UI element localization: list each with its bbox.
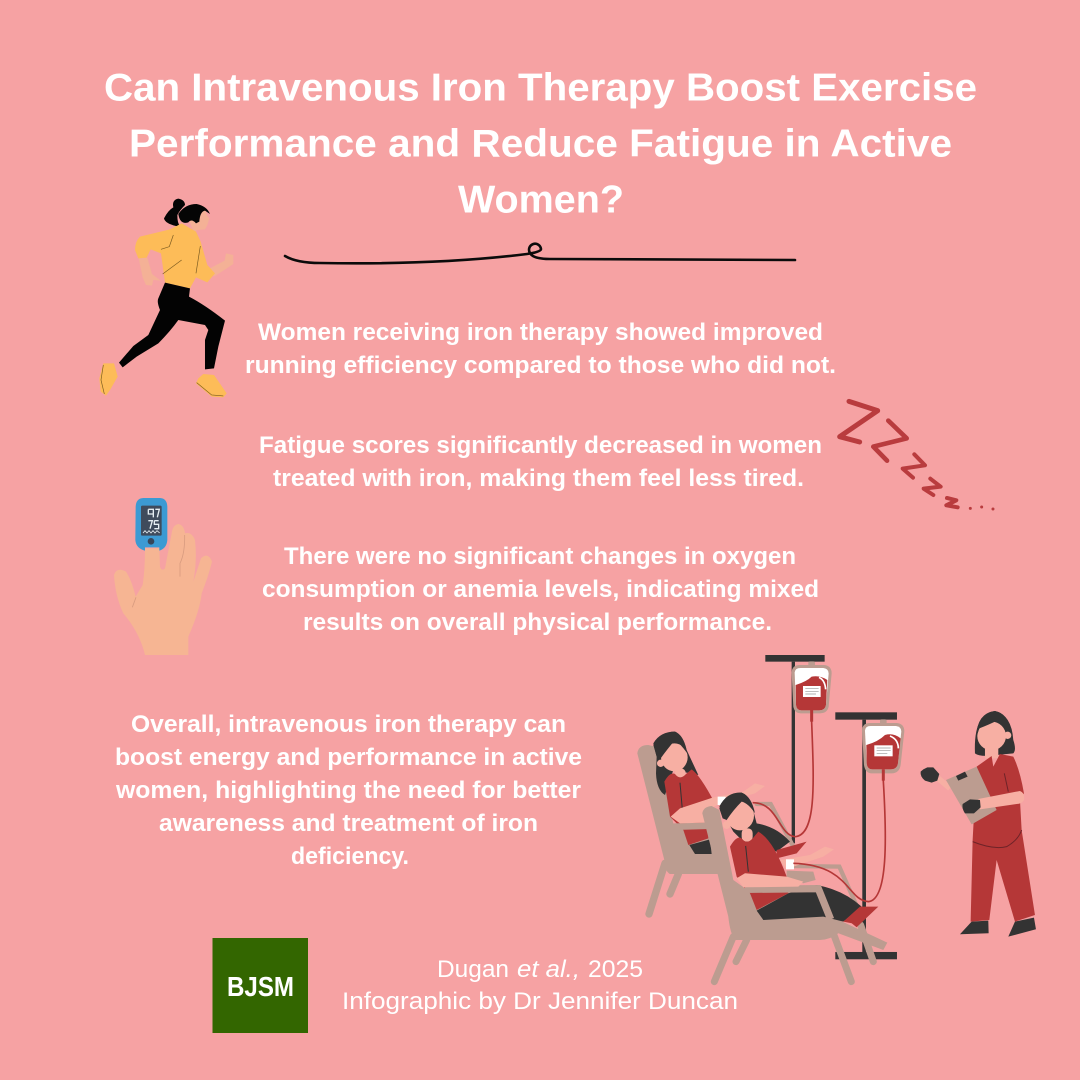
citation and credit bbox=[342, 956, 738, 1015]
hand bbox=[114, 524, 212, 655]
illustration: iron infusion bbox=[637, 655, 1036, 982]
hair bbox=[178, 204, 210, 223]
title: Can Intravenous Iron Therapy Boost Exercise bbox=[104, 66, 977, 110]
text block: overall conclusion: boost energy and performance in active bbox=[115, 744, 582, 771]
text block: overall conclusion: Overall, intravenous iron therapy can bbox=[131, 711, 566, 738]
back arm bbox=[139, 258, 161, 286]
first patient chair bbox=[637, 745, 721, 914]
icon: hand with pulse oximeter bbox=[114, 498, 212, 655]
icon: running woman bbox=[99, 199, 233, 397]
text block: overall conclusion bbox=[115, 711, 582, 870]
leggings bbox=[119, 283, 225, 369]
text block: fatigue: Fatigue scores significantly decreased in women bbox=[259, 432, 822, 459]
text block: oxygen consumption bbox=[262, 543, 819, 636]
oximeter readings bbox=[143, 509, 160, 533]
title bbox=[104, 66, 977, 222]
text block: running efficiency: Women receiving iron therapy showed improved bbox=[258, 319, 823, 346]
ponytail bbox=[164, 199, 185, 226]
shoes bbox=[960, 918, 1036, 937]
text block: overall conclusion: women, highlighting the need for better bbox=[115, 777, 581, 804]
logo: BJSM bbox=[212, 938, 308, 1033]
second IV pole bbox=[835, 712, 897, 959]
first patient bbox=[653, 732, 765, 854]
text block: oxygen consumption: consumption or anemia levels, indicating mixed bbox=[262, 576, 819, 603]
second patient bbox=[719, 793, 878, 927]
second blood bag bbox=[862, 719, 904, 773]
text block: overall conclusion: awareness and treatment of iron bbox=[159, 810, 538, 837]
title: Women? bbox=[458, 178, 624, 222]
text block: fatigue bbox=[259, 432, 822, 492]
oximeter screen bbox=[141, 506, 162, 536]
face bbox=[189, 210, 209, 233]
hand-drawn underline bbox=[285, 244, 795, 263]
sweatshirt bbox=[135, 223, 215, 288]
icon: sleeping zzz bbox=[840, 401, 994, 510]
second patient chair bbox=[702, 806, 887, 982]
citation and credit: Dugan bbox=[437, 956, 509, 983]
text block: oxygen consumption: results on overall physical performance. bbox=[303, 609, 772, 636]
citation and credit: et al., bbox=[517, 956, 580, 983]
text block: running efficiency: running efficiency compared to those who did not. bbox=[245, 352, 836, 379]
first chair armrest bbox=[757, 804, 793, 847]
text block: running efficiency bbox=[245, 319, 836, 379]
first blood bag bbox=[792, 661, 832, 713]
oximeter body bbox=[135, 498, 167, 551]
shoes bbox=[99, 363, 118, 396]
title: Performance and Reduce Fatigue in Active bbox=[129, 122, 952, 166]
text block: fatigue: treated with iron, making them feel less tired. bbox=[273, 465, 804, 492]
logo: BJSM: BJSM bbox=[227, 971, 294, 1002]
oximeter button bbox=[148, 538, 154, 545]
text block: oxygen consumption: There were no significant changes in oxygen bbox=[284, 543, 796, 570]
nurse bbox=[921, 711, 1036, 937]
front arm and fist bbox=[209, 253, 233, 277]
IV tubes bbox=[753, 710, 885, 902]
gloves bbox=[921, 767, 981, 813]
text block: overall conclusion: deficiency. bbox=[291, 843, 409, 870]
clipboard bbox=[946, 767, 997, 824]
first IV pole bbox=[765, 655, 825, 843]
citation and credit: Infographic by Dr Jennifer Duncan bbox=[342, 988, 738, 1015]
citation and credit: 2025 bbox=[588, 956, 643, 983]
